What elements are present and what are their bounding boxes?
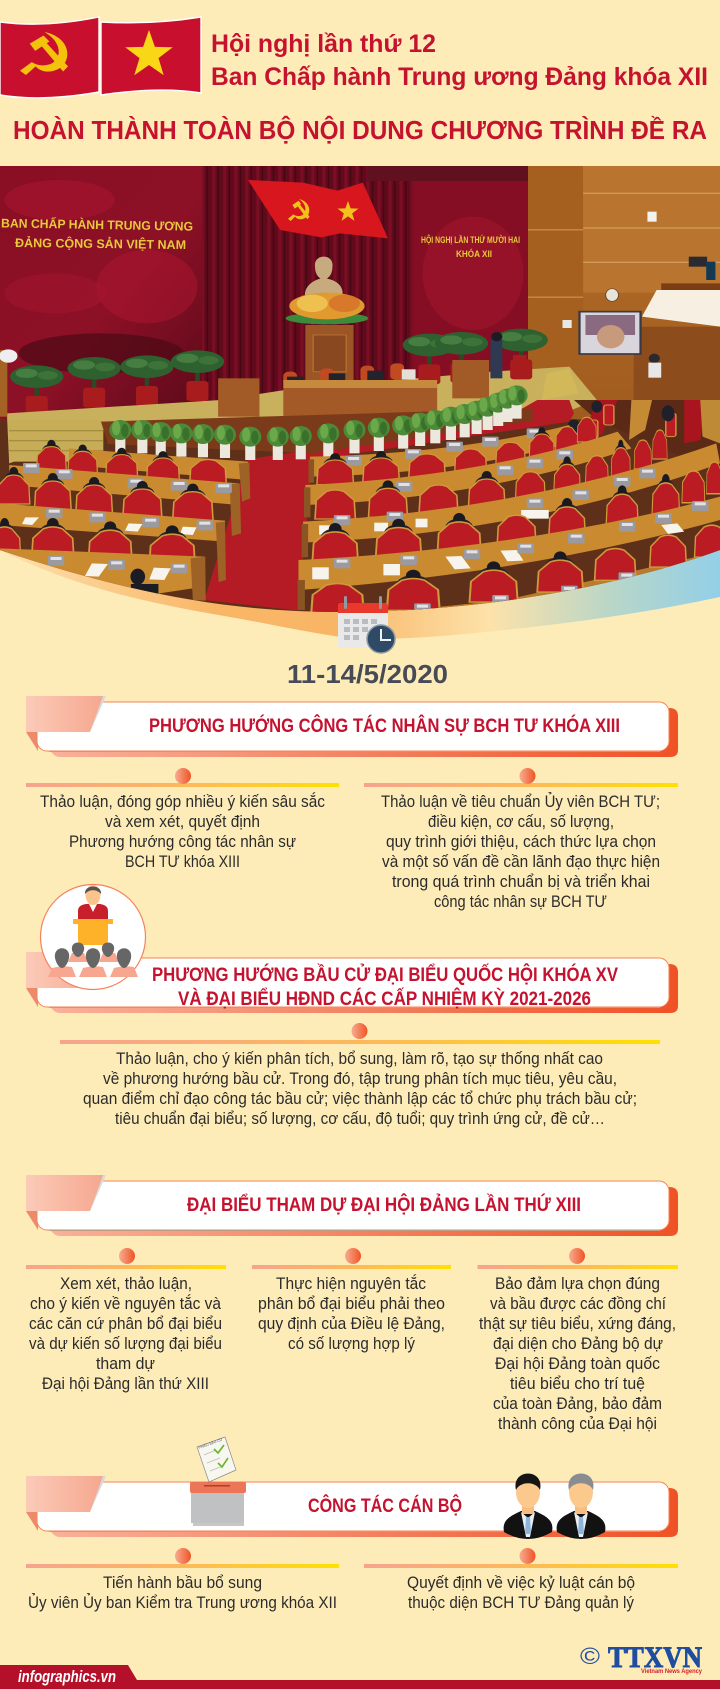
column: discussion and decision: Phương hướng công tác nhân sự: [69, 832, 296, 851]
column: allocation review: Đại hội Đảng lần thứ XIII: [42, 1374, 209, 1393]
panel: section 3: [26, 1175, 678, 1433]
photo: party congress hall: [0, 166, 720, 633]
column: allocation review: tham dự: [96, 1354, 155, 1373]
hall lettering right: [421, 234, 520, 259]
panel: section 4: [26, 1437, 678, 1612]
column: member criteria: công tác nhân sự BCH TƯ: [434, 892, 607, 911]
column: allocation principles: Thực hiện nguyên tắc: [276, 1274, 426, 1293]
column: discussion and decision: Thảo luận, đóng góp nhiều ý kiến sâu sắc: [40, 792, 325, 811]
column: allocation review: cho ý kiến về nguyên tắc và: [30, 1294, 221, 1313]
banner: congress delegates: ĐẠI BIỂU THAM DỰ ĐẠI HỘI ĐẢNG LẦN THỨ XIII: [187, 1192, 581, 1216]
icon: ballot box: [190, 1437, 246, 1526]
column: disciplinary decision: thuộc diện BCH TƯ Đảng quản lý: [408, 1593, 634, 1612]
column: election discussion: quan điểm chỉ đạo công tác bầu cử; việc thành lập các tổ chức phụ trách bầu cử;: [83, 1089, 637, 1108]
hall lettering left: [1, 215, 193, 252]
column: allocation review: [26, 1248, 226, 1393]
panel: section 1: [26, 696, 678, 911]
column: selection assurance: của toàn Đảng, bảo đảm: [493, 1394, 662, 1413]
icon: hall flag emblems: [288, 199, 358, 221]
column: election discussion: Thảo luận, cho ý kiến phân tích, bổ sung, làm rõ, tạo sự thống nhất cao: [116, 1049, 603, 1068]
panel: section 2: [26, 884, 678, 1128]
column: additional election: Ủy viên Ủy ban Kiểm tra Trung ương khóa XII: [28, 1593, 337, 1612]
icon: ballot box: PHIẾU BẦU CỬ: [198, 1437, 223, 1450]
column: allocation principles: có số lượng hợp lý: [288, 1334, 415, 1353]
date: 11-14/5/2020: [287, 661, 448, 689]
column: election discussion: tiêu chuẩn đại biểu; số lượng, cơ cấu, độ tuổi; quy trình ứng cử, đề cử…: [115, 1109, 605, 1128]
footer bar: infographics.vn: [18, 1667, 116, 1686]
column: additional election: Tiến hành bầu bổ sung: [103, 1573, 262, 1592]
icon: party flag: [0, 17, 99, 98]
column: discussion and decision: và xem xét, quyết định: [105, 812, 260, 831]
column: additional election: [26, 1548, 339, 1612]
column: selection assurance: thật sự tiêu biểu, xứng đáng,: [479, 1314, 676, 1333]
icon: calendar and clock: [338, 596, 395, 653]
title block: Hội nghị lần thứ 12: [211, 30, 436, 58]
title block: Ban Chấp hành Trung ương Đảng khóa XII: [211, 63, 708, 91]
banner: election direction: PHƯƠNG HƯỚNG BẦU CỬ ĐẠI BIỂU QUỐC HỘI KHÓA XV: [152, 962, 618, 986]
banner: election direction: [26, 952, 678, 1013]
footer bar: [0, 1665, 720, 1689]
banner: cadre work: CÔNG TÁC CÁN BỘ: [308, 1493, 462, 1517]
column: selection assurance: thành công của Đại hội: [498, 1414, 657, 1433]
column: selection assurance: tiêu biểu cho trí tuệ: [510, 1374, 645, 1393]
column: selection assurance: Bảo đảm lựa chọn đúng: [495, 1274, 660, 1293]
hall lettering right: HỘI NGHỊ LẦN THỨ MƯỜI HAI: [421, 234, 520, 245]
column: member criteria: trong quá trình chuẩn bị và triển khai: [392, 872, 650, 891]
column: allocation principles: phân bổ đại biểu phải theo: [258, 1294, 445, 1313]
hall lettering right: KHÓA XII: [456, 248, 492, 259]
icon: national flag: [101, 17, 201, 95]
column: allocation principles: [252, 1248, 451, 1353]
column: allocation review: Xem xét, thảo luận,: [60, 1274, 192, 1293]
icon: two officials: [504, 1474, 605, 1539]
column: member criteria: quy trình giới thiệu, cách thức lựa chọn: [386, 832, 656, 851]
logo: TTXVN: Vietnam News Agency: [641, 1668, 702, 1675]
column: member criteria: Thảo luận về tiêu chuẩn Ủy viên BCH TƯ;: [381, 792, 660, 811]
logo: TTXVN: [580, 1641, 702, 1675]
icon: speaker and audience: [40, 884, 146, 990]
logo: TTXVN: ©: [580, 1643, 600, 1669]
column: selection assurance: [478, 1248, 678, 1433]
logo: TTXVN: TTXVN: [608, 1641, 702, 1674]
column: allocation principles: quy định của Điều lệ Đảng,: [258, 1314, 445, 1333]
banner: personnel direction: [26, 696, 678, 757]
column: member criteria: và một số vấn đề cần lãnh đạo thực hiện: [382, 852, 660, 871]
column: member criteria: điều kiện, cơ cấu, số lượng,: [428, 812, 614, 831]
hall lettering left: BAN CHẤP HÀNH TRUNG ƯƠNG: [1, 215, 193, 234]
column: selection assurance: đại diện cho Đảng bộ dự: [493, 1334, 663, 1353]
banner: election direction: VÀ ĐẠI BIỂU HĐND CÁC CẤP NHIỆM KỲ 2021-2026: [178, 986, 591, 1010]
column: selection assurance: Đại hội Đảng toàn quốc: [495, 1354, 660, 1373]
column: member criteria: [364, 768, 678, 911]
column: disciplinary decision: Quyết định về việc kỷ luật cán bộ: [407, 1573, 635, 1592]
banner: personnel direction: PHƯƠNG HƯỚNG CÔNG TÁC NHÂN SỰ BCH TƯ KHÓA XIII: [149, 713, 620, 737]
column: discussion and decision: [26, 768, 339, 871]
column: selection assurance: và bầu được các đồng chí: [490, 1294, 666, 1313]
column: allocation review: và dự kiến số lượng đại biểu: [29, 1334, 222, 1353]
column: allocation review: các căn cứ phân bổ đại biểu: [29, 1314, 222, 1333]
column: disciplinary decision: [364, 1548, 678, 1612]
banner: cadre work: [26, 1476, 678, 1537]
column: election discussion: [60, 1023, 660, 1128]
banner: congress delegates: [26, 1175, 678, 1236]
swoosh under photo: [0, 540, 720, 639]
column: discussion and decision: BCH TƯ khóa XIII: [125, 852, 240, 871]
column: election discussion: về phương hướng bầu cử. Trong đó, tập trung phân tích mục tiêu, yêu cầu,: [103, 1069, 617, 1088]
hall lettering left: ĐẢNG CỘNG SẢN VIỆT NAM: [15, 235, 186, 252]
header flags: [0, 17, 201, 98]
title block: [211, 30, 708, 91]
